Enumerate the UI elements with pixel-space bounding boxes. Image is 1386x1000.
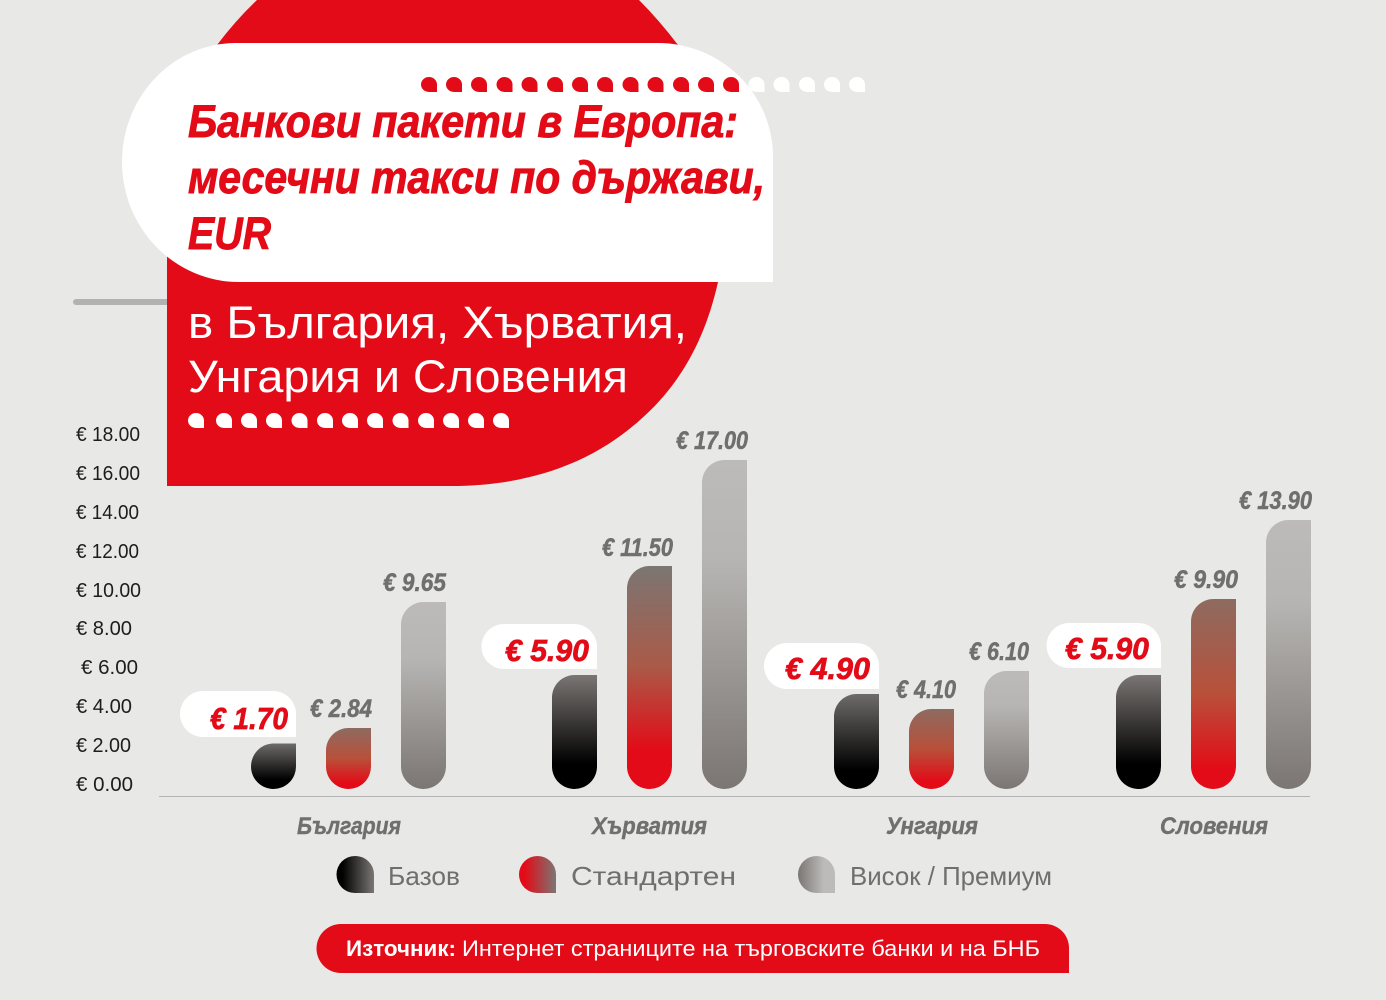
value: € 9.65: € 9.65 xyxy=(383,569,447,597)
subtitle: Унгария и Словения xyxy=(188,351,628,402)
source bar: Интернет страниците на търговските банки и на БНБ xyxy=(462,936,1040,961)
bar: Хърватия базов xyxy=(552,675,597,789)
value: € 5.90: € 5.90 xyxy=(1065,631,1149,666)
bar: България висок xyxy=(401,602,446,789)
y axis labels: € 2.00 xyxy=(76,735,131,757)
value: € 5.90: € 5.90 xyxy=(505,633,589,668)
top dots row xyxy=(421,77,865,92)
legend swatch: стандартен xyxy=(519,856,556,893)
callout: Хърватия базов xyxy=(482,624,597,669)
country label: Унгария: Унгария xyxy=(886,813,978,840)
red header shape xyxy=(167,0,726,486)
legend label: стандартен: Стандартен xyxy=(571,861,736,891)
chart group: Хърватия xyxy=(482,427,748,840)
bottom dots row xyxy=(188,413,509,428)
value: € 4.90: € 4.90 xyxy=(785,651,870,686)
title: месечни такси по държави, xyxy=(188,152,765,203)
callout: Унгария базов xyxy=(764,643,879,689)
subtitle xyxy=(188,297,687,402)
bar: България стандартен xyxy=(326,728,371,789)
legend xyxy=(336,856,1052,893)
bar: Унгария висок xyxy=(984,671,1029,789)
gray rule beside header xyxy=(73,299,170,305)
country label: България: България xyxy=(297,813,401,840)
y axis labels: € 18.00 xyxy=(76,424,140,446)
bar: Унгария стандартен xyxy=(909,709,954,789)
value: € 13.90: € 13.90 xyxy=(1239,487,1312,515)
axis baseline xyxy=(159,796,1310,797)
title: Банкови пакети в Европа: xyxy=(188,96,738,147)
country label: Словения: Словения xyxy=(1160,813,1268,840)
bar: Хърватия стандартен xyxy=(627,566,672,789)
bar: Словения стандартен xyxy=(1191,599,1236,789)
y axis labels: € 4.00 xyxy=(76,696,132,718)
y axis labels: € 0.00 xyxy=(76,774,133,796)
y axis labels: € 10.00 xyxy=(76,580,141,602)
bar: Словения висок xyxy=(1266,520,1311,789)
subtitle: в България, Хърватия, xyxy=(188,297,687,348)
bar: Унгария базов xyxy=(834,694,879,789)
value: € 9.90: € 9.90 xyxy=(1174,566,1238,594)
legend label: висок / премиум: Висок / Премиум xyxy=(850,861,1052,891)
value: € 11.50: € 11.50 xyxy=(602,534,673,562)
title xyxy=(188,96,765,259)
white title panel xyxy=(122,43,773,282)
y axis labels: € 6.00 xyxy=(81,657,138,679)
legend label: базов: Базов xyxy=(388,861,460,891)
value: € 4.10: € 4.10 xyxy=(896,676,956,704)
chart group: Словения xyxy=(1046,487,1312,840)
legend swatch: висок xyxy=(798,856,835,893)
y axis labels: € 12.00 xyxy=(76,541,139,563)
country label: Хърватия: Хърватия xyxy=(590,813,707,840)
title: EUR xyxy=(188,208,271,259)
source bar xyxy=(316,924,1069,973)
value: € 2.84: € 2.84 xyxy=(310,695,372,723)
value: € 1.70: € 1.70 xyxy=(210,701,288,736)
bar: Словения базов xyxy=(1116,675,1161,789)
value: € 17.00: € 17.00 xyxy=(676,427,748,455)
y axis labels: € 8.00 xyxy=(76,618,132,640)
y axis labels xyxy=(76,424,141,796)
source text: Източник: xyxy=(346,936,456,961)
bar: Хърватия висок xyxy=(702,460,747,789)
legend swatch: базов xyxy=(336,856,374,893)
chart group: България xyxy=(180,569,447,840)
bar: България базов xyxy=(251,744,296,789)
callout: Словения базов xyxy=(1046,623,1161,668)
chart group: Унгария xyxy=(764,638,1029,840)
y axis labels: € 14.00 xyxy=(76,502,139,524)
callout: България базов xyxy=(180,691,296,737)
value: € 6.10: € 6.10 xyxy=(969,638,1029,666)
y axis labels: € 16.00 xyxy=(76,463,140,485)
